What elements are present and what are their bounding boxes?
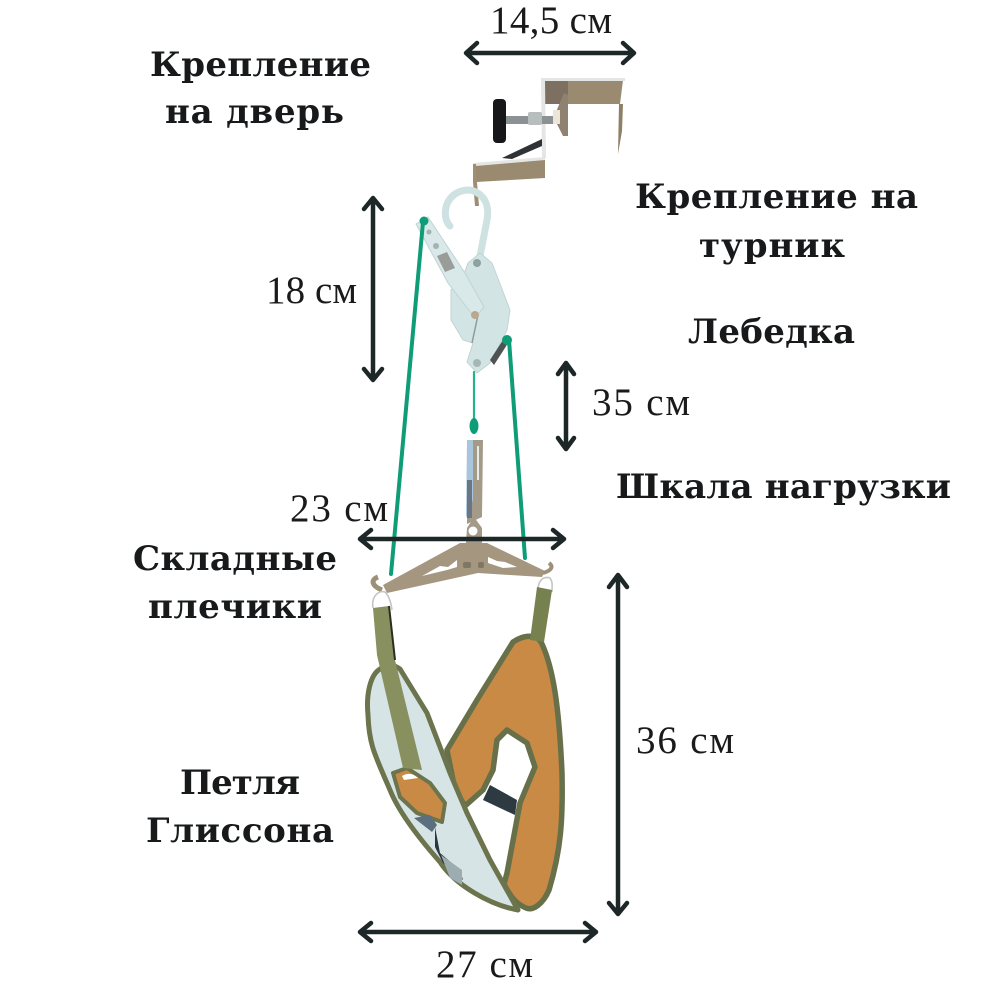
label: bar mount: Крепление на — [635, 177, 918, 217]
head sling: grey back panel — [368, 665, 518, 910]
measurement: width of door mount: 14,5 см — [490, 0, 612, 42]
dimension arrow: 36 cm — [609, 575, 627, 914]
label: bar mount: турник — [699, 226, 845, 266]
measurement: sling width: 27 см — [436, 943, 533, 986]
door bracket — [473, 78, 625, 206]
dimension arrow: 23 cm — [360, 530, 564, 548]
label: Glisson sling: Петля — [180, 763, 300, 803]
right strap — [530, 587, 552, 642]
dimension arrow: 27 cm — [360, 923, 596, 941]
label: door mount: на дверь — [165, 92, 344, 132]
left strap — [373, 606, 422, 770]
label: load scale: Шкала нагрузки — [616, 467, 951, 507]
dimension arrow: 14,5 cm — [466, 43, 634, 63]
green cords — [391, 216, 525, 574]
load scale — [466, 440, 483, 543]
folding hanger — [373, 543, 552, 610]
label: door mount: Крепление — [150, 45, 371, 85]
dimension arrow: 35 cm — [558, 363, 574, 449]
label: Glisson sling: Глиссона — [146, 811, 334, 851]
measurement: hanger width: 23 см — [290, 487, 388, 530]
measurement: travel: 35 см — [592, 381, 690, 424]
measurement: winch height: 18 см — [266, 269, 357, 312]
label: door mount — [150, 45, 371, 132]
label: folding hanger — [133, 539, 337, 627]
dimension arrow: 18 cm — [364, 198, 382, 380]
label: folding hanger: плечики — [148, 587, 322, 627]
measurement: sling height: 36 см — [636, 719, 734, 762]
dark connector strap — [483, 785, 517, 815]
label: bar mount — [635, 177, 918, 266]
head sling: orange chin panel — [447, 636, 562, 909]
label: winch: Лебедка — [688, 312, 855, 352]
label: folding hanger: Складные — [133, 539, 337, 579]
label: Glisson sling — [146, 763, 334, 851]
winch with hook — [416, 190, 510, 373]
